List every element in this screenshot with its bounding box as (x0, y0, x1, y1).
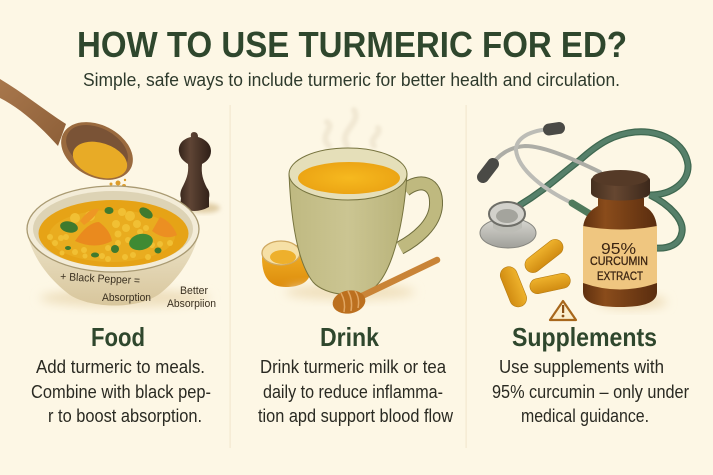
title: HOW TO USE TURMERIC FOR ED? (77, 24, 627, 65)
icon: mug of golden milk (285, 148, 436, 300)
panel: food (0, 79, 220, 426)
icon: curcumin bottle: EXTRACT (597, 271, 643, 283)
icon: honey dipper (331, 260, 437, 316)
icon: wooden spoon with turmeric (0, 79, 143, 191)
subtitle: Simple, safe ways to include turmeric for better health and circulation. (83, 69, 620, 90)
icon: stethoscope (480, 128, 688, 248)
label: black pepper equation (60, 271, 151, 304)
icon: bowl of curry (27, 186, 210, 307)
text: food description: Combine with black pep- (31, 382, 211, 402)
label: better absorption: Absorpiion (167, 298, 216, 310)
icon: curcumin bottle (583, 170, 667, 309)
text: supplements description: medical guidance. (521, 406, 649, 426)
icon: curcumin bottle: CURCUMIN (590, 256, 648, 268)
text: food description: r to boost absorption. (48, 406, 202, 426)
text: supplements description (492, 357, 689, 426)
text: supplements description: 95% curcumin – only under (492, 382, 689, 402)
heading: drink: Drink (320, 322, 379, 352)
icon: warning triangle (550, 301, 576, 320)
icon: pepper grinder (179, 132, 220, 213)
heading: food: Food (91, 322, 145, 352)
text: drink description: Drink turmeric milk or tea (260, 357, 447, 377)
label: better absorption (167, 285, 216, 310)
icon: falling turmeric powder (106, 179, 130, 199)
icon: honey jar (262, 241, 310, 287)
label: better absorption: Better (180, 285, 208, 297)
icon: steam (325, 110, 379, 146)
label: black pepper equation: + Black Pepper = (60, 271, 140, 287)
text: drink description (258, 357, 454, 426)
panel: drink (258, 110, 454, 426)
icon: curcumin bottle: 95% (601, 241, 636, 258)
text: drink description: daily to reduce inflamma- (263, 382, 443, 402)
panel: supplements (480, 128, 689, 426)
text: drink description: tion apd support blood flow (258, 406, 454, 426)
text: supplements description: Use supplements with (499, 357, 664, 377)
label: black pepper equation: Absorption (102, 292, 151, 304)
heading: supplements: Supplements (512, 322, 657, 352)
text: food description (31, 357, 211, 426)
text: food description: Add turmeric to meals. (36, 357, 205, 377)
icon: capsules (498, 236, 572, 309)
